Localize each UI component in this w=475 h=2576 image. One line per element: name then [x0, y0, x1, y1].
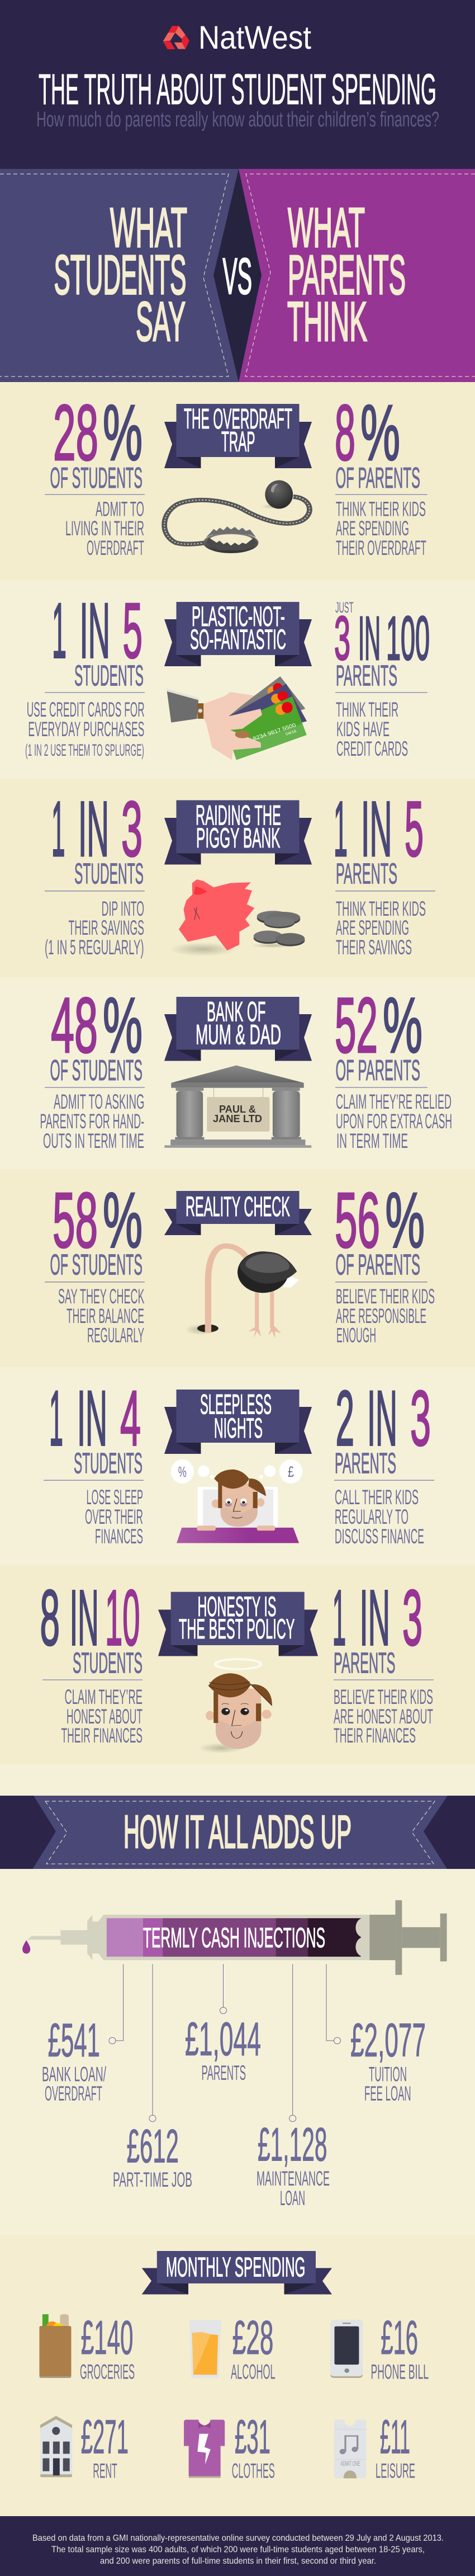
panel: honesty is the best policy: [0, 1566, 475, 1764]
banner: the overdraft trap: THE OVERDRAFT: [184, 403, 292, 435]
amount: bank loan or overdraft: [42, 2014, 106, 2105]
panel: monthly spending: LEISURE: [376, 2459, 415, 2483]
icon: hand holding credit cards: 8234 9817 5500: [252, 723, 297, 742]
parent stat: ENOUGH: [336, 1324, 376, 1347]
panel: sleepless nights: FINANCES: [95, 1525, 143, 1548]
banner: plastic-not-so-fantastic: PLASTIC-NOT-: [192, 601, 285, 632]
panel: monthly spending: £271: [81, 2411, 129, 2464]
parent stat: %: [360, 388, 400, 477]
student stat: [40, 981, 145, 1152]
banner: reality check: [164, 1191, 312, 1235]
item: groceries: [39, 2311, 135, 2383]
panel: what students say versus what parents think: STUDENTS: [54, 244, 187, 305]
student stat: 5: [123, 586, 142, 675]
amount: maintenance loan: LOAN: [280, 2187, 305, 2210]
panel: plastic-not-so-fantastic: (1 IN 2 USE THEM TO SPLURGE): [25, 741, 144, 760]
panel: footer source note: and 200 were parents of full-time students in their first, second or third year.: [100, 2556, 376, 2566]
student stat: [44, 1374, 144, 1548]
student stat: 28: [53, 388, 98, 477]
parent stat: 3: [402, 1573, 422, 1661]
banner: reality check: REALITY CHECK: [186, 1191, 290, 1222]
panel: honesty is the best policy: CLAIM THEY’RE: [65, 1685, 142, 1708]
banner: sleepless nights: SLEEPLESS: [200, 1388, 272, 1420]
amount: tuition fee loan: [350, 2014, 426, 2105]
parent stat: 3: [410, 1374, 431, 1462]
banner: bank of mum and dad: [164, 996, 312, 1061]
amount: tuition fee loan: FEE LOAN: [364, 2082, 411, 2105]
panel: what students say versus what parents think: [0, 169, 475, 382]
panel: monthly spending: CLOTHES: [232, 2459, 275, 2483]
parent stat: 52: [335, 981, 378, 1069]
parent stat: [335, 1176, 435, 1347]
icon: man with halo: [198, 1659, 272, 1753]
connector lines: [109, 1964, 341, 2122]
banner: raiding the piggy bank: [164, 800, 312, 865]
panel: raiding the piggy bank: STUDENTS: [74, 858, 144, 891]
panel: plastic-not-so-fantastic: STUDENTS: [74, 660, 144, 693]
student stat: %: [103, 1176, 142, 1264]
panel: honesty is the best policy: STUDENTS: [73, 1647, 142, 1679]
panel: sleepless nights: OVER THEIR: [85, 1505, 143, 1528]
parent stat: [335, 981, 452, 1152]
student stat: 8: [40, 1573, 60, 1661]
panel: raiding the piggy bank: DIP INTO: [102, 897, 144, 920]
banner: sleepless nights: [164, 1388, 312, 1454]
panel: how it all adds up: [0, 1764, 475, 2235]
parent stat: IN TERM TIME: [336, 1129, 408, 1152]
icon: NatWest logo: [163, 26, 189, 49]
icon: worried man in bed: £: [288, 1463, 294, 1480]
student stat: [45, 785, 145, 959]
student stat: [45, 1176, 145, 1347]
panel: what students say versus what parents think: VS: [222, 248, 252, 305]
parent stat: PARENTS: [336, 858, 397, 891]
banner: plastic-not-so-fantastic: SO-FANTASTIC: [190, 624, 286, 655]
banner: raiding the piggy bank: PIGGY BANK: [196, 822, 281, 854]
amount: maintenance loan: £1,128: [258, 2118, 327, 2170]
panel: plastic-not-so-fantastic: [0, 580, 475, 779]
student stat: 58: [53, 1176, 98, 1264]
amount: parents: PARENTS: [201, 2061, 246, 2084]
student stat: [40, 1573, 142, 1747]
student stat: ADMIT TO: [96, 498, 144, 520]
parent stat: %: [383, 981, 422, 1069]
parent stat: PARENTS: [336, 660, 397, 693]
icon: ball and chain trap: [164, 481, 310, 553]
student stat: %: [103, 981, 142, 1069]
student stat: %: [103, 388, 142, 477]
banner: monthly spending: MONTHLY SPENDING: [166, 2252, 305, 2282]
panel: raiding the piggy bank: [0, 779, 475, 977]
parent stat: [334, 785, 435, 959]
banner: plastic-not-so-fantastic: [164, 601, 312, 666]
panel: reality check: OF STUDENTS: [50, 1249, 142, 1281]
parent stat: 1: [334, 785, 348, 873]
icon: broken piggy bank and coins: [170, 879, 305, 956]
panel: bank of mum and dad: PARENTS FOR HAND-: [40, 1110, 144, 1133]
heading: what parents think: [287, 196, 406, 352]
icon: ostrich with head in hole: [185, 1246, 300, 1338]
icon: hand holding credit cards: [167, 676, 307, 760]
item: groceries: £140: [81, 2311, 133, 2365]
panel: reality check: SAY THEY CHECK: [58, 1285, 145, 1308]
parent stat: [335, 388, 428, 559]
panel: honesty is the best policy: 10: [105, 1573, 140, 1661]
student stat: 4: [120, 1374, 141, 1462]
panel: the overdraft trap: OF STUDENTS: [50, 462, 142, 495]
panel: monthly spending: ALCOHOL: [231, 2361, 276, 2383]
syringe chart: termly cash injections: [22, 1900, 447, 1975]
parent stat: [334, 1374, 434, 1548]
item: clothes: £31: [235, 2411, 270, 2464]
panel: monthly spending: £11: [380, 2411, 410, 2464]
panel: sleepless nights: STUDENTS: [74, 1448, 142, 1480]
panel: the overdraft trap: LIVING IN THEIR: [65, 517, 144, 540]
amount: bank loan or overdraft: BANK LOAN/: [42, 2063, 106, 2085]
parent stat: THINK THEIR: [336, 698, 398, 721]
parent stat: 1: [332, 1573, 346, 1661]
panel: the overdraft trap: OVERDRAFT: [87, 536, 144, 559]
student stat: 3: [121, 785, 142, 873]
amount: parents: [185, 2013, 261, 2084]
icon: bank building with sign: PAUL &: [219, 1104, 256, 1115]
panel: bank of mum and dad: [0, 977, 475, 1169]
banner: bank of mum and dad: BANK OF: [207, 996, 265, 1027]
panel: honesty is the best policy: THEIR FINANCES: [61, 1724, 142, 1747]
student stat: 48: [51, 981, 98, 1069]
icon: worried man in bed: [171, 1459, 302, 1543]
student stat: 1: [52, 586, 66, 675]
banner: the overdraft trap: TRAP: [221, 426, 255, 458]
student stat: 1: [49, 1374, 63, 1462]
panel: raiding the piggy bank: THEIR SAVINGS: [68, 916, 144, 939]
parent stat: [334, 599, 430, 760]
item: clothes: [184, 2411, 275, 2483]
item: rent: RENT: [93, 2459, 117, 2483]
panel: reality check: REGULARLY: [87, 1324, 144, 1347]
panel: footer source note: The total sample size was 400 adults, of which 200 were full-time students aged between 18-25 years,: [51, 2545, 425, 2554]
heading: what parents think: THINK: [287, 290, 367, 352]
panel: how it all adds up: MAINTENANCE: [256, 2167, 330, 2190]
student stat: (1 IN 5 REGULARLY): [45, 936, 144, 959]
parent stat: IN: [358, 604, 381, 673]
heading: what students say: [54, 196, 187, 352]
banner: honesty is the best policy: [158, 1591, 318, 1656]
panel: reality check: [0, 1169, 475, 1367]
parent stat: 2: [335, 1374, 354, 1462]
icon: bank building with sign: [164, 1066, 311, 1148]
parent stat: IN: [360, 1573, 390, 1661]
panel: footer source note: Based on data from a GMI nationally-representative online survey conducted between 29 July and 2 August 2013.: [32, 2533, 444, 2543]
heading: what parents think: WHAT: [288, 196, 365, 258]
panel: plastic-not-so-fantastic: USE CREDIT CARDS FOR: [27, 698, 145, 721]
item: leisure: ADMIT ONE: [341, 2460, 360, 2467]
amount: part-time job: PART-TIME JOB: [113, 2168, 192, 2191]
item: phone bill: [330, 2311, 429, 2383]
parent stat: 8: [335, 388, 355, 477]
panel: what students say versus what parents think: SAY: [136, 290, 186, 352]
panel: monthly spending: [0, 2235, 475, 2516]
item: rent: [40, 2411, 129, 2483]
student stat: IN: [77, 1374, 107, 1462]
panel: plastic-not-so-fantastic: EVERYDAY PURCHASES: [28, 718, 144, 741]
parent stat: PARENTS: [335, 1448, 396, 1480]
parent stat: KIDS HAVE: [336, 718, 390, 741]
parent stat: 3: [334, 604, 350, 673]
parent stat: %: [386, 1176, 425, 1264]
panel: bank of mum and dad: OF STUDENTS: [50, 1054, 142, 1087]
panel: sleepless nights: LOSE SLEEP: [86, 1486, 143, 1509]
amount: bank loan or overdraft: £541: [48, 2014, 100, 2066]
banner: sleepless nights: NIGHTS: [214, 1412, 263, 1444]
panel: honesty is the best policy: HONEST ABOUT: [66, 1705, 142, 1728]
banner: honesty is the best policy: THE BEST POLICY: [179, 1613, 295, 1645]
student stat: [45, 388, 145, 559]
parent stat: 5: [405, 785, 424, 873]
banner: monthly spending: [142, 2251, 332, 2295]
icon: hand holding credit cards: 04/16: [284, 729, 297, 736]
parent stat: IN: [361, 785, 392, 873]
student stat: IN: [78, 785, 109, 873]
parent stat: IN: [367, 1374, 397, 1462]
amount: part-time job: £612: [127, 2120, 179, 2173]
panel: footer source note: [0, 2516, 475, 2576]
student stat: 1: [51, 785, 65, 873]
parent stat: 56: [335, 1176, 380, 1264]
parent stat: PARENTS: [334, 1647, 396, 1679]
amount: parents: £1,044: [185, 2013, 261, 2065]
icon: worried man in bed: %: [178, 1463, 187, 1480]
logo wordmark: NatWest: [198, 20, 311, 56]
banner: honesty is the best policy: HONESTY IS: [198, 1591, 276, 1622]
amount: part-time job: [113, 2120, 192, 2191]
panel: header: [0, 0, 475, 169]
parent stat: JUST: [335, 599, 354, 616]
banner: the overdraft trap: [164, 403, 312, 468]
icon: bank building with sign: JANE LTD: [213, 1113, 262, 1124]
item: phone bill: £16: [381, 2311, 418, 2365]
item: leisure: [334, 2411, 415, 2483]
banner: raiding the piggy bank: RAIDING THE: [196, 800, 281, 831]
student stat: IN: [70, 1573, 99, 1661]
banner: bank of mum and dad: MUM & DAD: [196, 1019, 281, 1051]
item: alcohol: £28: [232, 2311, 274, 2365]
item: alcohol: [189, 2311, 276, 2383]
panel: what students say versus what parents think: WHAT: [110, 196, 187, 258]
student stat: IN: [79, 586, 110, 675]
parent stat: [332, 1573, 434, 1747]
student stat: ADMIT TO ASKING: [54, 1090, 144, 1113]
student stat: [25, 586, 145, 760]
panel: reality check: THEIR BALANCE: [66, 1305, 144, 1327]
amount: maintenance loan: [256, 2118, 330, 2210]
panel: monthly spending: GROCERIES: [80, 2361, 135, 2383]
panel: how it all adds up: OVERDRAFT: [45, 2082, 102, 2105]
amount: tuition fee loan: TUITION: [369, 2063, 407, 2085]
panel: sleepless nights: [0, 1367, 475, 1566]
panel: the overdraft trap: [0, 382, 475, 580]
student stat: OUTS IN TERM TIME: [43, 1129, 144, 1152]
